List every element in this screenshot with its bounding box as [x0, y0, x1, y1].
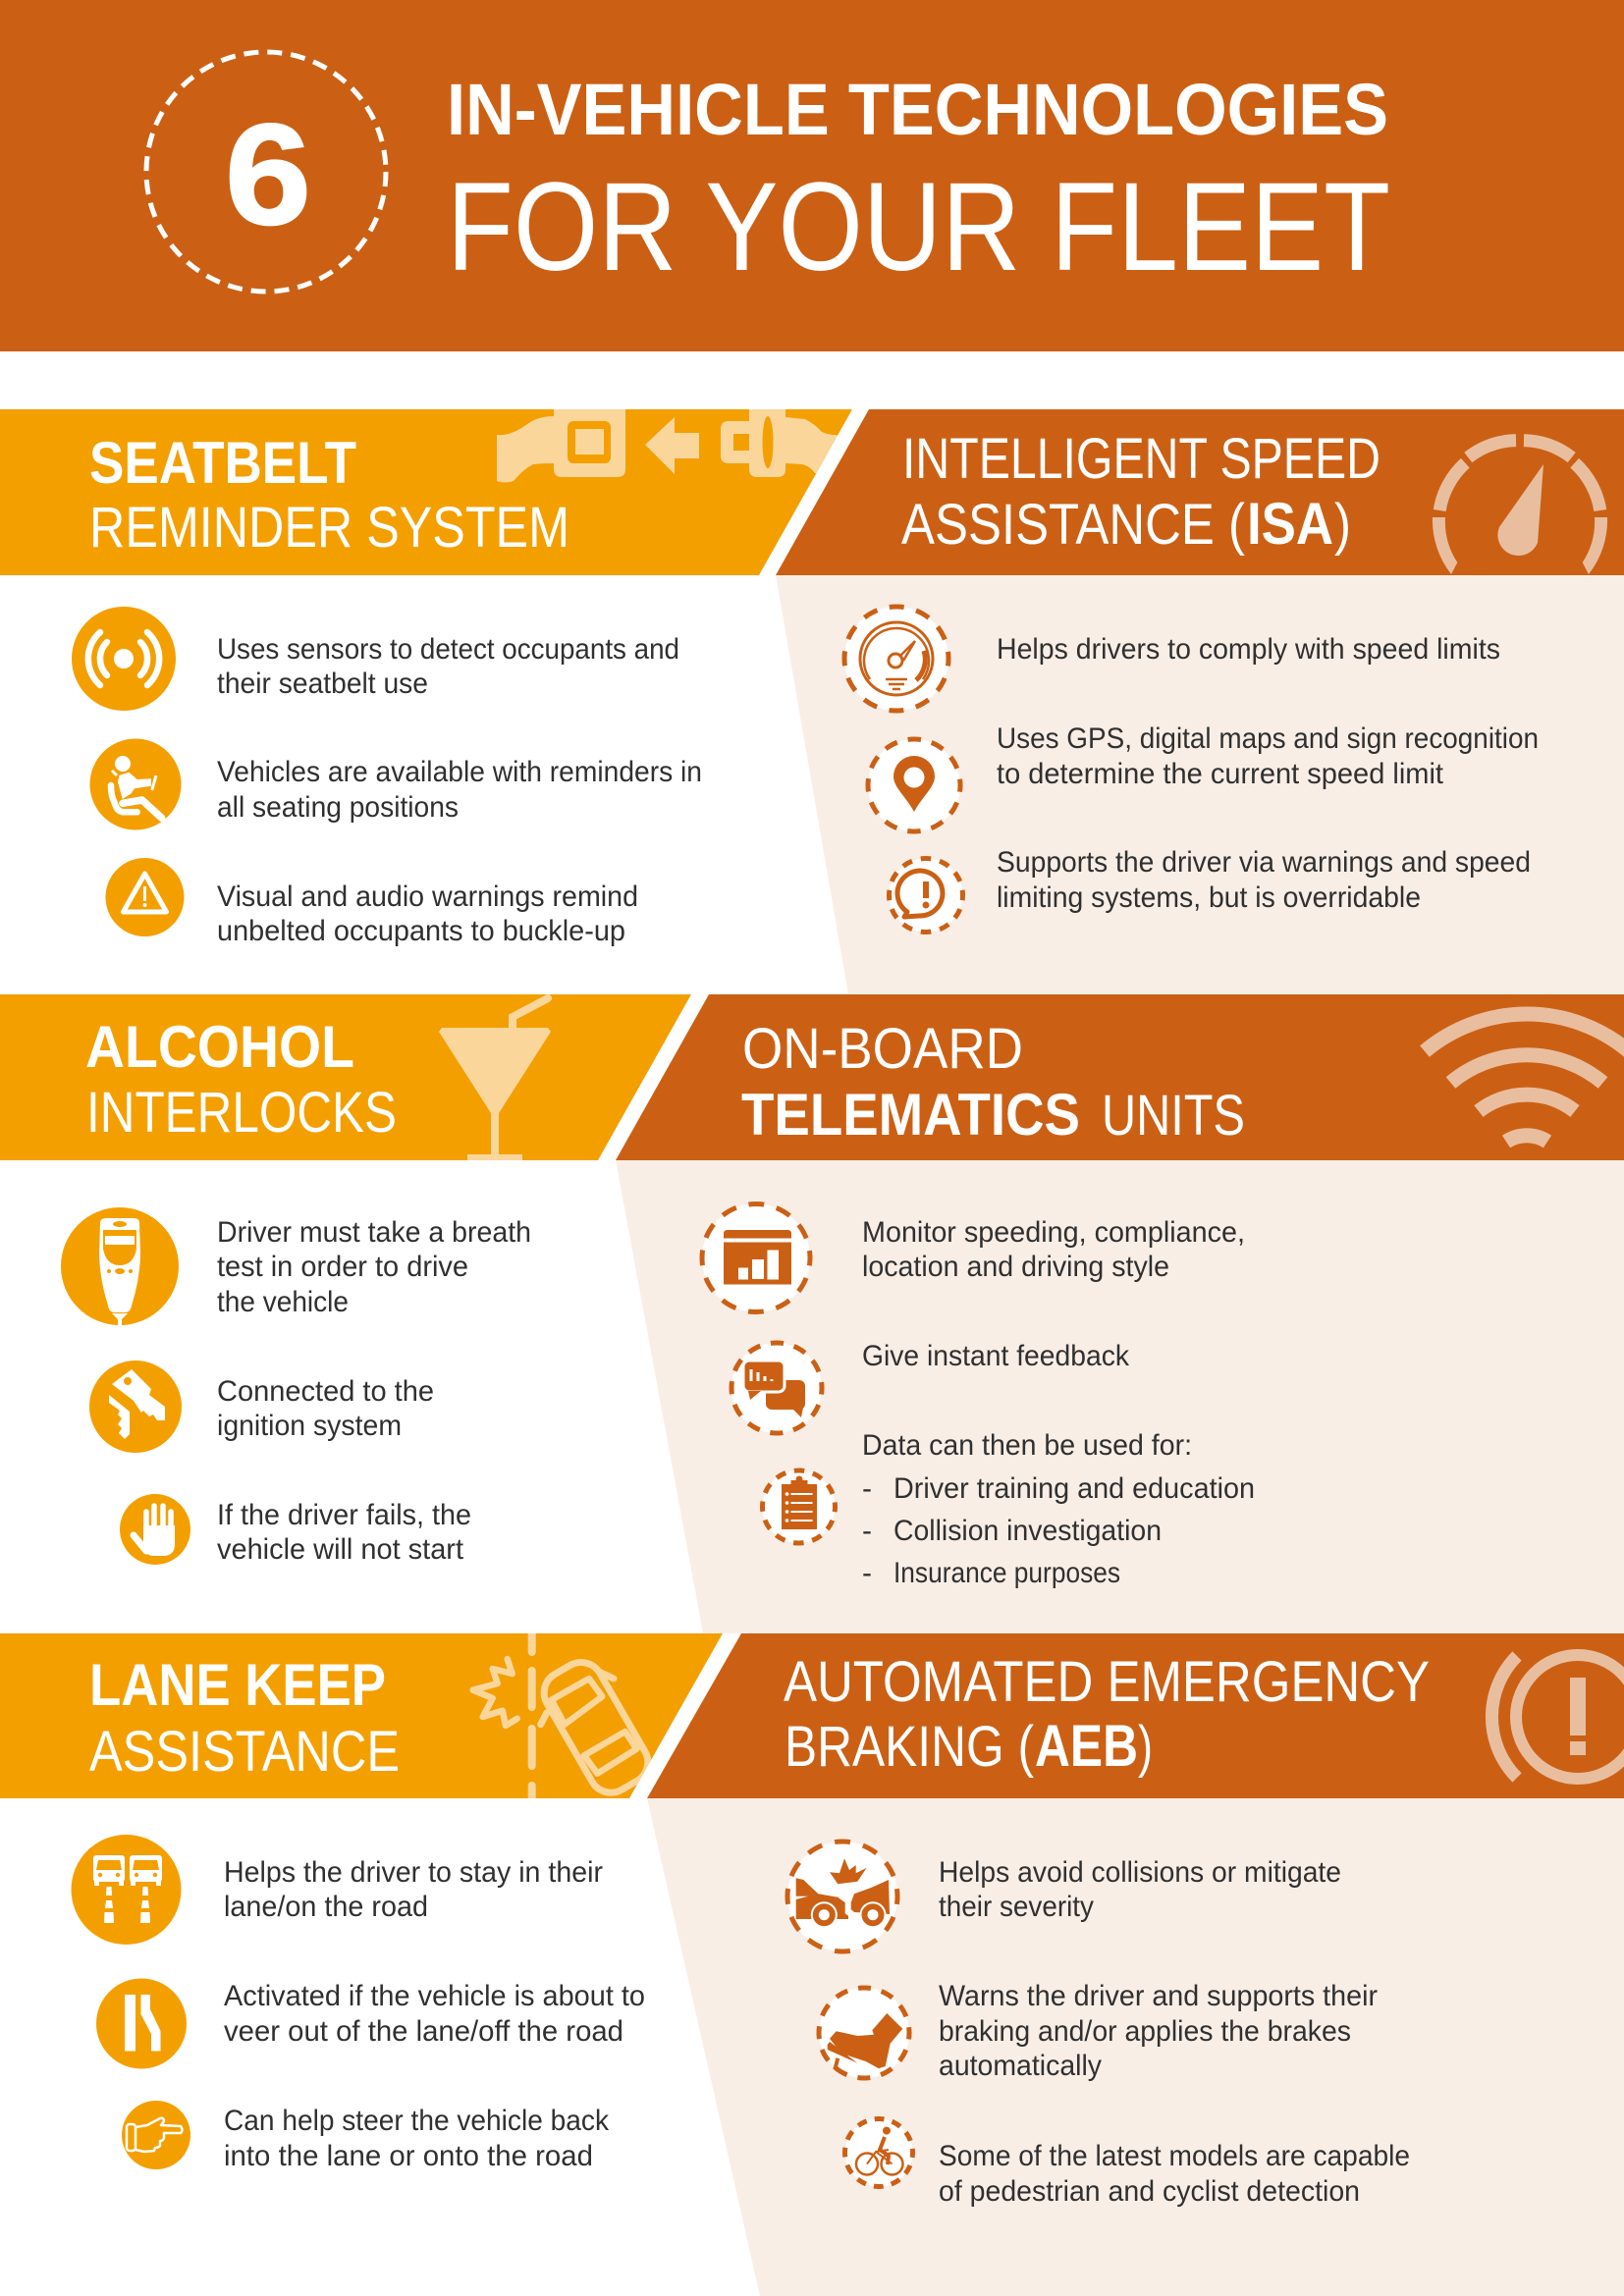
text: seating positions: all seating positions — [217, 791, 459, 824]
text: steer back: into the lane or onto the road — [224, 2140, 593, 2172]
text: activation: Activated if the vehicle is about to — [224, 1980, 645, 2012]
text: data uses: Driver training and education — [893, 1472, 1255, 1505]
text: warnings: unbelted occupants to buckle-up — [217, 915, 625, 947]
text: pedestrian detection — [939, 2140, 1410, 2208]
text: speed limits: Helps drivers to comply with speed limits — [997, 633, 1500, 666]
heading band: lane keep: ASSISTANCE — [89, 1720, 400, 1784]
heading band: AEB: BRAKING ( — [785, 1715, 1034, 1779]
heading band: seatbelt — [0, 409, 852, 575]
text: data uses — [862, 1429, 1255, 1589]
text: warnings and limiting: limiting systems, but is overridable — [997, 881, 1421, 914]
heading band: AEB: ) — [1138, 1715, 1153, 1779]
text: monitor: location and driving style — [862, 1251, 1169, 1283]
text: sensors: Uses sensors to detect occupants and — [217, 633, 679, 666]
text: breath test — [217, 1216, 531, 1318]
text: avoid collisions: Helps avoid collisions or mitigate — [939, 1856, 1341, 1889]
text: braking — [939, 1980, 1378, 2082]
icon: speedometer — [1433, 441, 1607, 574]
heading band: ISA: INTELLIGENT SPEED — [902, 427, 1380, 491]
heading band: ISA: ISA — [1247, 491, 1333, 557]
icon: sensor — [72, 607, 176, 711]
panel: automated emergency braking — [647, 1633, 1624, 2296]
icon: seated driver — [90, 738, 181, 830]
header banner — [0, 0, 1624, 351]
text: ignition: ignition system — [217, 1410, 402, 1442]
text: data uses: - — [862, 1472, 872, 1505]
text: braking: braking and/or applies the brakes — [939, 2015, 1351, 2048]
text: ignition — [217, 1375, 434, 1442]
text: avoid collisions: their severity — [939, 1891, 1094, 1923]
text: braking: Warns the driver and supports their — [939, 1980, 1378, 2012]
text: vehicle will not start: vehicle will not start — [217, 1533, 464, 1566]
text: breath test: Driver must take a breath — [217, 1216, 531, 1249]
text: stay in lane: lane/on the road — [224, 1891, 428, 1923]
icon: stop hand — [120, 1494, 190, 1565]
heading band: AEB: AUTOMATED EMERGENCY — [784, 1650, 1430, 1714]
text: stay in lane: Helps the driver to stay in their — [224, 1856, 603, 1889]
icon: wifi waves — [1425, 1014, 1624, 1142]
icon: seatbelt buckle and arrow — [497, 409, 844, 483]
panel background — [616, 1160, 1624, 1633]
text: vehicle will not start — [217, 1499, 471, 1566]
text: GPS: to determine the current speed limit — [997, 758, 1444, 790]
heading band: AEB: AEB — [1035, 1713, 1138, 1779]
text: warnings and limiting — [997, 846, 1531, 914]
text: breath test: the vehicle — [217, 1286, 349, 1318]
icon: keys — [89, 1361, 182, 1453]
text: stay in lane — [224, 1856, 603, 1923]
icon: cyclist — [844, 2118, 913, 2187]
heading band: lane keep: LANE KEEP — [89, 1652, 386, 1718]
icon: chat bubbles — [731, 1343, 822, 1433]
text: steer back: Can help steer the vehicle back — [224, 2105, 610, 2137]
text: sensors: their seatbelt use — [217, 667, 428, 700]
panel: on-board telematics units — [616, 994, 1624, 1633]
heading band: telematics: UNITS — [1102, 1084, 1245, 1148]
text: seating positions: Vehicles are available with reminders in — [217, 756, 702, 788]
icon: dashed circle with number 6: 6 — [225, 94, 311, 254]
icon: map pin — [868, 739, 960, 831]
text: warnings and limiting: Supports the driver via warnings and speed — [997, 846, 1531, 879]
icon: brake warning — [1491, 1655, 1624, 1779]
text: breath test: test in order to drive — [217, 1251, 468, 1283]
title — [447, 69, 1390, 297]
heading band: lane keep — [0, 1633, 723, 1798]
text: warnings — [217, 881, 638, 947]
panel: alcohol interlocks — [0, 994, 691, 1566]
icon: clipboard — [762, 1470, 835, 1543]
heading band: alcohol: INTERLOCKS — [86, 1081, 397, 1145]
icon: alert speech bubble — [890, 858, 962, 933]
text: GPS: Uses GPS, digital maps and sign recognition — [997, 722, 1539, 755]
title: IN-VEHICLE TECHNOLOGIES — [447, 69, 1388, 150]
heading band: AEB — [647, 1633, 1624, 1798]
text: data uses: Data can then be used for: — [862, 1429, 1192, 1462]
icon: warning triangle — [106, 858, 185, 936]
text: data uses: - — [862, 1515, 872, 1547]
heading band: telematics: ON-BOARD — [742, 1017, 1023, 1081]
icon: road bend — [96, 1979, 187, 2069]
text: vehicle will not start: If the driver fails, the — [217, 1499, 471, 1531]
heading band: alcohol — [0, 994, 691, 1160]
icon: pointing hand — [122, 2101, 190, 2169]
panel: seatbelt reminder system — [0, 409, 852, 947]
text: monitor: Monitor speeding, compliance, — [862, 1216, 1245, 1249]
text: braking: automatically — [939, 2050, 1102, 2082]
text: sensors — [217, 633, 679, 700]
text: ignition: Connected to the — [217, 1375, 434, 1408]
text: warnings: Visual and audio warnings remind — [217, 881, 638, 913]
icon: car collision — [787, 1842, 897, 1951]
text: GPS — [997, 722, 1539, 790]
heading band: telematics: TELEMATICS — [741, 1082, 1080, 1148]
text: monitor — [862, 1216, 1245, 1283]
heading band: ISA: ASSISTANCE ( — [901, 493, 1245, 557]
text: pedestrian detection: Some of the latest models are capable — [939, 2140, 1410, 2172]
heading band: ISA — [776, 409, 1624, 575]
heading band: alcohol: ALCOHOL — [85, 1014, 354, 1080]
heading band: ISA: ) — [1334, 493, 1351, 557]
icon: dashed circle with number 6 — [146, 52, 386, 292]
panel: lane keep assistance — [0, 1629, 723, 2172]
icon: speed gauge — [844, 607, 948, 711]
icon: dashboard chart — [702, 1203, 810, 1311]
panel background — [647, 1798, 1624, 2296]
icon: boot on brake pedal — [819, 1988, 909, 2078]
panel: intelligent speed assistance — [776, 409, 1624, 994]
heading band: telematics — [616, 994, 1624, 1160]
text: pedestrian detection: of pedestrian and cyclist detection — [939, 2175, 1360, 2208]
icon: car crossing lane line — [473, 1629, 656, 1806]
text: seating positions — [217, 756, 702, 824]
text: steer back — [224, 2105, 610, 2172]
text: feedback: Give instant feedback — [862, 1340, 1130, 1372]
title: FOR YOUR FLEET — [447, 157, 1390, 297]
text: avoid collisions — [939, 1856, 1341, 1923]
icon: cocktail glass — [439, 998, 551, 1160]
text: activation — [224, 1980, 645, 2048]
text: activation: veer out of the lane/off the road — [224, 2015, 623, 2048]
text: data uses: Collision investigation — [893, 1515, 1162, 1547]
panel background — [776, 575, 1624, 994]
icon: breathalyzer — [61, 1207, 179, 1325]
heading band: seatbelt: REMINDER SYSTEM — [89, 496, 569, 560]
text: data uses: Insurance purposes — [893, 1557, 1120, 1589]
icon: two cars in lanes — [71, 1835, 181, 1945]
text: data uses: - — [862, 1557, 872, 1589]
heading band: seatbelt: SEATBELT — [89, 430, 356, 496]
